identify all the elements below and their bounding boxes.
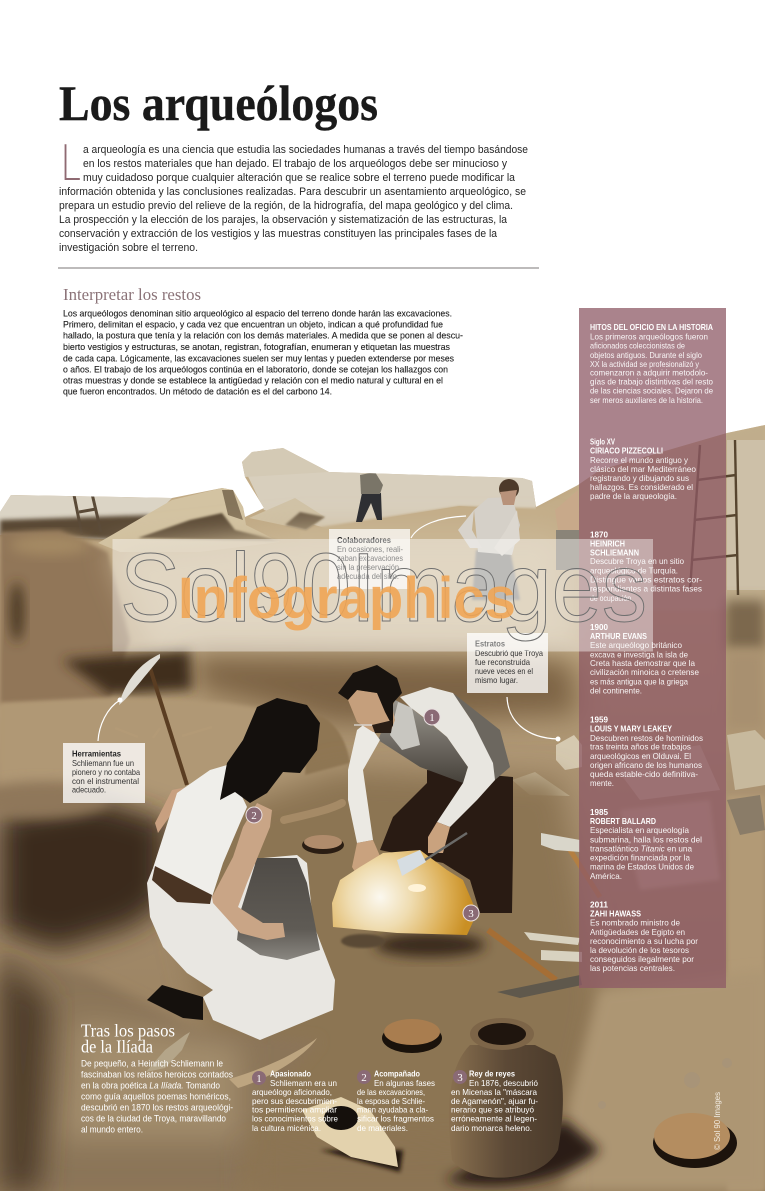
entry: 2011: Antigüedades de Egipto en bbox=[590, 927, 685, 937]
figure: standing worker bbox=[458, 479, 520, 600]
text block: tras los pasos bbox=[81, 1058, 233, 1134]
column: apasionado: Schliemann era un bbox=[270, 1078, 337, 1088]
right sand bank bbox=[560, 984, 728, 1191]
callout: estratos: Estratos bbox=[475, 638, 505, 648]
callout: colaboradores: Colaboradores bbox=[337, 535, 391, 545]
small tools bbox=[115, 727, 212, 738]
left mound bbox=[0, 530, 130, 705]
heading: tras los pasos: Tras los pasos bbox=[81, 1020, 175, 1040]
column: apasionado: Apasionado bbox=[270, 1068, 311, 1078]
text block: tras los pasos: fascinaban los relatos heroicos contados bbox=[81, 1070, 233, 1080]
text block: interpretar los restos: otras muestras y donde se establece la antigüedad y relación con el medio natural y cultural en el bbox=[63, 376, 443, 386]
text block: tras los pasos: en la obra poética La Ilíada. Tomando bbox=[81, 1080, 220, 1090]
callout: estratos bbox=[467, 633, 548, 693]
column: rey de reyes: En 1876, descubrió bbox=[469, 1078, 538, 1088]
column: acompañado: mann ayudaba a cla- bbox=[357, 1104, 428, 1114]
entry: 1985 bbox=[590, 807, 702, 881]
right ladder bbox=[690, 440, 738, 595]
entry: 1900: es más antigua que la griega bbox=[590, 676, 688, 686]
small rock bbox=[249, 498, 325, 530]
leader line: colaboradores bbox=[411, 516, 466, 538]
column: acompañado: sificar los fragmentos bbox=[357, 1114, 434, 1124]
entry: 1900: Creta hasta demostrar que la bbox=[590, 658, 695, 668]
column: apasionado: arqueólogo aficionado, bbox=[252, 1087, 332, 1097]
column: apasionado: los conocimientos sobre bbox=[252, 1114, 338, 1124]
entry: siglo XV: CIRIACO PIZZECOLLI bbox=[590, 446, 663, 456]
intro text block: a arqueología es una ciencia que estudia las sociedades humanas a través del tiempo basándose bbox=[83, 144, 528, 156]
entry: 1985: marina de Estados Unidos de bbox=[590, 862, 694, 872]
callout: colaboradores: adecuada del sitio. bbox=[337, 571, 399, 581]
figure: partial worker behind panel bbox=[556, 530, 579, 570]
ladder at left bbox=[72, 496, 100, 520]
figure: distant worker bbox=[356, 473, 383, 522]
column: rey de reyes bbox=[451, 1068, 538, 1133]
entry: 1870 bbox=[590, 530, 702, 603]
text block: interpretar los restos: Primero, delimitan el espacio, y cada vez que encuentran un objeto, indican a qué profundidad fue bbox=[63, 320, 443, 330]
text block: interpretar los restos: Los arqueólogos denominan sitio arqueológico al espacio del terreno donde harán las excavaciones. bbox=[63, 308, 452, 318]
panel intro: de las ciencias sociales. Dejaron de bbox=[590, 386, 713, 396]
column: rey de reyes: Rey de reyes bbox=[469, 1068, 515, 1078]
back sand bbox=[110, 530, 580, 650]
panel intro: comenzaron a adquirir metodolo- bbox=[590, 368, 708, 378]
entry: 1985: expedición financiada por la bbox=[590, 852, 690, 862]
dark stratum bbox=[190, 655, 580, 725]
text block: tras los pasos: como guía aquellos poemas homéricos, bbox=[81, 1092, 231, 1102]
text block: tras los pasos: al mundo entero. bbox=[81, 1124, 143, 1134]
stones at right bbox=[556, 735, 582, 770]
drop cap L: L bbox=[60, 135, 81, 192]
intro text block bbox=[59, 135, 528, 254]
column: apasionado: pero sus descubrimien- bbox=[252, 1096, 337, 1106]
heading: tras los pasos bbox=[81, 1020, 175, 1056]
callout: estratos: Descubrió que Troya bbox=[475, 648, 543, 658]
column: rey de reyes: de Agamenón", ajuar fu- bbox=[451, 1096, 538, 1106]
panel: hitos del oficio bbox=[579, 308, 726, 988]
intro text block: en los restos materiales que han dejado. El trabajo de los arqueólogos debe ser minucioso y bbox=[83, 158, 508, 170]
number marker 1 bbox=[424, 709, 440, 725]
small bowl bbox=[382, 1019, 442, 1053]
column: rey de reyes: en Micenas la "máscara bbox=[451, 1087, 537, 1097]
panel intro: objetos antiguos. Durante el siglo bbox=[590, 350, 702, 360]
entry: 2011: Es nombrado ministro de bbox=[590, 918, 680, 928]
panel intro: gías de trabajo distintivas del resto bbox=[590, 376, 713, 386]
text block: tras los pasos: descubrió en 1870 los restos arqueológi- bbox=[81, 1102, 233, 1112]
entry: 2011: las potencias centrales. bbox=[590, 963, 675, 973]
callout: herramientas: Herramientas bbox=[72, 748, 121, 758]
pebbles bbox=[598, 1058, 732, 1109]
entry: 1870: de ocupación. bbox=[590, 593, 633, 603]
hammer bbox=[541, 833, 600, 897]
entry: 1900: Este arqueólogo británico bbox=[590, 640, 682, 650]
broken vessel bbox=[302, 1097, 403, 1172]
number marker 2 bbox=[246, 807, 262, 823]
entry: siglo XV: clásico del mar Mediterráneo bbox=[590, 464, 696, 474]
intro text block: conservación y extracción de los vestigios y las muestras constituyen las principales fases de la bbox=[59, 228, 497, 240]
column: rey de reyes: erróneamente al legen- bbox=[451, 1114, 537, 1124]
callout: colaboradores: zaban excavaciones bbox=[337, 553, 403, 563]
column: acompañado bbox=[357, 1068, 435, 1133]
callout: colaboradores: En ocasiones, reali- bbox=[337, 544, 403, 554]
entry: 1870: Descubre Troya en un sitio bbox=[590, 556, 684, 566]
watermark: infographics: Infographics bbox=[178, 566, 516, 631]
lower left sand plain bbox=[2, 695, 256, 716]
text block: interpretar los restos: que fueron encontrados. Un método de datación es el del carbono 14. bbox=[63, 386, 332, 396]
credit: © Sol 90 Images bbox=[713, 1092, 722, 1150]
column: acompañado: 2 bbox=[361, 1072, 367, 1084]
entry: 1959: arqueológicos en Olduvai. El bbox=[590, 751, 691, 761]
entry: 1985: Especialista en arqueología bbox=[590, 825, 689, 835]
callout: estratos: fue reconstruida bbox=[475, 657, 530, 667]
callout: herramientas: pionero y no contaba bbox=[72, 767, 140, 777]
fossil bone bbox=[284, 803, 342, 820]
entry: 2011: 2011 bbox=[590, 900, 608, 910]
entry: 1959: Descubren restos de homínidos bbox=[590, 733, 703, 743]
fossil near heading bbox=[146, 1032, 190, 1072]
bowl bbox=[302, 835, 344, 854]
number marker 3 bbox=[463, 905, 479, 921]
mound behind the man bbox=[305, 713, 350, 775]
text block: interpretar los restos: de cada capa. Lógicamente, las excavaciones suelen ser muy lentas y pueden extenderse por meses bbox=[63, 354, 454, 364]
number marker 1: 1 bbox=[429, 712, 435, 724]
illustration: excavation scene bbox=[0, 420, 765, 1191]
text block: interpretar los restos: bierto vestigios y estructuras, se anotan, registran, fotografían, enumeran y etiquetan las muestras bbox=[63, 342, 450, 352]
background figures bbox=[356, 460, 579, 600]
entry: 2011: ZAHI HAWASS bbox=[590, 908, 641, 918]
column: acompañado: En algunas fases bbox=[374, 1078, 435, 1088]
panel intro: ser meros auxiliares de la historia. bbox=[590, 395, 703, 405]
column: acompañado: de materiales. bbox=[357, 1123, 408, 1133]
entry: 1959: origen africano de los humanos bbox=[590, 760, 702, 770]
entry: 1959: LOUIS Y MARY LEAKEY bbox=[590, 724, 672, 734]
entry: 2011 bbox=[590, 900, 698, 973]
column: apasionado: tos permitieron ampliar bbox=[252, 1104, 337, 1114]
lower-left mound bbox=[0, 954, 203, 1172]
entry: siglo XV: hallazgos. Es considerado el bbox=[590, 482, 693, 492]
entry: siglo XV: padre de la arqueología. bbox=[590, 491, 677, 501]
title: Los arqueólogos bbox=[59, 75, 378, 131]
panel intro: HITOS DEL OFICIO EN LA HISTORIA bbox=[590, 322, 713, 332]
entry: 1900 bbox=[590, 622, 699, 696]
intro text block: investigación sobre el terreno. bbox=[59, 242, 198, 254]
brush bbox=[397, 833, 467, 876]
entry: 1900: 1900 bbox=[590, 622, 608, 632]
central stone wall bbox=[245, 470, 536, 528]
right zone bbox=[579, 425, 765, 610]
intro text block: La prospección y la elección de los parajes, la observación y sistematización de las estructuras, la bbox=[59, 214, 507, 226]
entry: 1959: mente. bbox=[590, 778, 614, 788]
callout: colaboradores bbox=[329, 529, 410, 589]
intro text block: información obtenida y las conclusiones realizadas. Para descubrir un asentamiento arqueológico, se bbox=[59, 186, 526, 198]
gold mask bbox=[332, 850, 477, 948]
panel intro: Los primeros arqueólogos fueron bbox=[590, 332, 708, 342]
entry: siglo XV: Recorre el mundo antiguo y bbox=[590, 455, 689, 465]
entry: 2011: la devolución de los tesoros bbox=[590, 945, 689, 955]
entry: 1900: ARTHUR EVANS bbox=[590, 631, 647, 641]
column: apasionado: 1 bbox=[256, 1073, 262, 1085]
entry: 1870: arqueológico de Turquía. bbox=[590, 566, 678, 576]
column: acompañado: de las excavaciones, bbox=[357, 1087, 425, 1097]
number marker 3: 3 bbox=[468, 908, 474, 920]
entry: 1959: tras treinta años de trabajos bbox=[590, 742, 691, 752]
entry: 1985: transatlántico Titanic en una bbox=[590, 844, 692, 854]
leader line: estratos bbox=[507, 697, 560, 742]
entry: 1985: ROBERT BALLARD bbox=[590, 816, 656, 826]
entry: siglo XV: registrando y dibujando sus bbox=[590, 473, 689, 483]
entry: 1870: HEINRICH bbox=[590, 538, 625, 548]
heading: interpretar los restos: Interpretar los restos bbox=[63, 285, 201, 304]
entry: 1985: 1985 bbox=[590, 807, 608, 817]
callout: herramientas: con el instrumental bbox=[72, 776, 139, 786]
entry: 1870: 1870 bbox=[590, 530, 608, 540]
text block: interpretar los restos: hallado, la postura que tenía y la relación con los demás materiales. A medida que se ponen al descu- bbox=[63, 330, 463, 340]
column: apasionado bbox=[252, 1068, 338, 1133]
entry: 1985: América. bbox=[590, 871, 622, 881]
central sand bbox=[192, 762, 597, 1136]
watermark: sol90images: Sol90Images bbox=[120, 533, 647, 642]
bowl at right bbox=[653, 1113, 737, 1168]
column: acompañado: Acompañado bbox=[374, 1068, 420, 1078]
panel intro: XX la actividad se profesionalizó y bbox=[590, 359, 700, 369]
entry: 1870: Distingue varios estratos cor- bbox=[590, 574, 702, 584]
pickaxe bbox=[488, 930, 582, 998]
entry: 1959: queda estable-cido definitiva- bbox=[590, 769, 698, 779]
column: rey de reyes: 3 bbox=[457, 1072, 463, 1084]
entry: siglo XV: Siglo XV bbox=[590, 436, 615, 446]
tool: upright pick bbox=[119, 654, 187, 785]
callout: herramientas: adecuado. bbox=[72, 784, 106, 794]
column: apasionado: la cultura micénica. bbox=[252, 1123, 321, 1133]
back sand slope bbox=[320, 505, 536, 528]
callout: herramientas: Schliemann fue un bbox=[72, 758, 134, 768]
intro text block: prepara un estudio previo del relieve de la región, de la hidrografía, del mapa geológico y del clima. bbox=[59, 200, 513, 212]
callout: herramientas bbox=[63, 743, 145, 803]
entry: 1900: excava e investiga la isla de bbox=[590, 650, 688, 660]
clay vase bbox=[445, 1018, 600, 1186]
entry: 1959: 1959 bbox=[590, 714, 608, 724]
dark left rock bbox=[0, 800, 165, 950]
column: rey de reyes: dario monarca heleno. bbox=[451, 1123, 532, 1133]
entry: siglo XV bbox=[590, 436, 696, 501]
entry: 2011: conseguidos ilegalmente por bbox=[590, 954, 694, 964]
entry: 1959 bbox=[590, 714, 703, 788]
white tools bbox=[524, 932, 582, 962]
bone spear bbox=[229, 1038, 317, 1088]
callout: estratos: mismo lugar. bbox=[475, 675, 518, 685]
leader line: herramientas bbox=[98, 698, 122, 741]
callout: estratos: nueve veces en el bbox=[475, 666, 533, 676]
watermark band bbox=[112, 539, 653, 652]
entry: 1985: submarina, halla los restos del bbox=[590, 834, 702, 844]
figure: woman bbox=[147, 698, 335, 1040]
entry: 1870: SCHLIEMANN bbox=[590, 548, 639, 558]
heading: tras los pasos: de la Ilíada bbox=[81, 1036, 153, 1056]
rock on the wall bbox=[242, 448, 329, 477]
left stone wall bbox=[0, 495, 172, 540]
column: rey de reyes: nerario que se atribuyó bbox=[451, 1104, 534, 1114]
text block: tras los pasos: De pequeño, a Heinrich Schliemann le bbox=[81, 1058, 223, 1068]
rock at left bbox=[98, 488, 280, 552]
callout: colaboradores: sin la preservación bbox=[337, 562, 399, 572]
panel intro bbox=[590, 322, 713, 405]
text block: interpretar los restos bbox=[63, 308, 463, 396]
entry: 2011: reconocimiento a su lucha por bbox=[590, 936, 698, 946]
entry: 1870: respondientes a distintas fases bbox=[590, 584, 702, 594]
figure: man bbox=[338, 665, 513, 913]
number marker 2: 2 bbox=[251, 810, 257, 822]
text block: tras los pasos: cos de la ciudad de Troya, maravillando bbox=[81, 1114, 226, 1124]
entry: 1900: civilización minoica o cretense bbox=[590, 667, 699, 677]
intro text block: muy cuidadoso porque cualquier alteración que se realice sobre el terreno puede modificar la bbox=[83, 172, 515, 184]
text block: interpretar los restos: o años. El trabajo de los arqueólogos continúa en el laboratorio, donde se cotejan los hallazgos con bbox=[63, 364, 448, 374]
shadow under mask bbox=[375, 933, 485, 957]
panel intro: aficionados coleccionistas de bbox=[590, 340, 685, 350]
entry: 1900: del continente. bbox=[590, 686, 642, 696]
column: acompañado: la esposa de Schlie- bbox=[357, 1096, 425, 1106]
